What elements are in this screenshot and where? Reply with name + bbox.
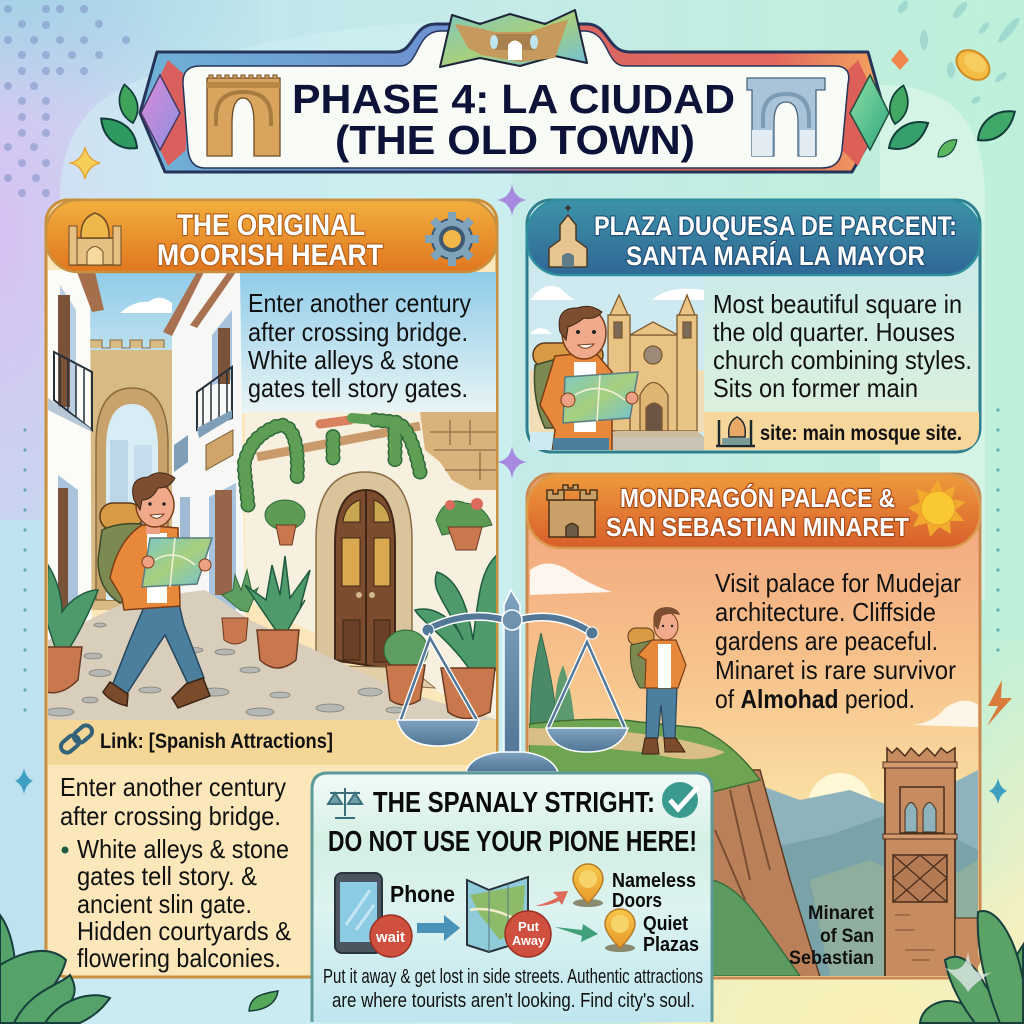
stone gate tower [90,340,174,610]
map emblem [440,10,587,67]
lower text block: Hidden courtyards & [77,916,291,946]
callout text: Put it away & get lost in side streets. Authentic attractions [323,966,703,988]
description text: of Almohad period. [715,684,915,714]
church scene [530,272,704,452]
hiker on cliff [628,607,686,754]
callout headline: DO NOT USE YOUR PIONE HERE! [328,826,697,858]
lower text block: flowering balconies. [77,943,281,973]
gem left [141,75,180,150]
title text: PHASE 4: LA CIUDAD [292,76,735,122]
plant bottom right [920,911,1023,1023]
lower text block: gates tell story. & [77,861,257,891]
cloud [120,298,172,313]
description text: Sits on former main [713,373,918,403]
small pot [222,570,258,644]
intro text background [238,272,496,414]
description text: Most beautiful square in [713,289,962,319]
icon: map with put away badge: Put [518,919,540,934]
arrow: phone to map [417,915,460,941]
header pill [527,200,980,275]
icon: pin one [573,864,603,907]
grassy plateau [529,719,760,792]
intro text: after crossing bridge. [248,317,468,347]
left white building [48,270,104,640]
panel body [527,474,980,978]
description text: church combining styles. [713,345,972,375]
destination label two [643,913,699,956]
balance scale [397,590,628,772]
arched door [308,472,435,688]
icon: sun [908,480,966,537]
right arch icon [747,78,825,156]
icon: castle [547,485,597,537]
street scene [46,270,497,725]
description text: Visit palace for Mudejar [715,568,961,598]
title banner [140,10,889,172]
arrow: to quiet plazas [555,924,598,942]
phone label: Phone [390,881,455,907]
cobbled ground [46,590,497,725]
minaret label: of San [820,926,874,947]
destination label one: Nameless [612,870,696,892]
intro text: White alleys & stone [248,345,459,375]
leafy pot right [415,555,497,718]
link strip: Link: [Spanish Attractions] [100,730,333,753]
header text: THE ORIGINAL [177,209,365,242]
agave pot [245,556,310,668]
callout text [323,966,703,1012]
header text: MOORISH HEART [157,239,383,272]
leaves and sparkle top left [71,83,144,179]
site strip: site: main mosque site. [760,422,962,445]
banner plate [183,31,849,168]
title text: (THE OLD TOWN) [335,117,695,163]
panel: mondragon palace and minaret [527,474,980,978]
intro text: Enter another century [248,288,471,318]
description text [713,289,972,403]
icon: mosque [69,213,121,265]
icon: map with put away badge: Away [512,933,546,948]
left arch icon [207,75,280,156]
shrub pot [384,630,428,705]
destination label one [612,870,696,912]
link strip [48,720,496,765]
callout: do not use your phone [312,773,712,1022]
header text [606,483,909,542]
callout text: are where tourists aren't looking. Find city's soul. [332,990,695,1012]
cliff [712,770,820,977]
lower text block: White alleys & stone [77,834,289,864]
description text: the old quarter. Houses [713,317,955,347]
minaret label [789,903,875,969]
arrow: to nameless doors [535,891,568,906]
gem right [850,75,889,150]
wall with doorway [244,412,497,720]
hiker with map [533,306,638,452]
icon: check badge [662,782,698,818]
hanging vines [244,418,420,505]
icon: phone with wait badge: wait [375,929,405,946]
halftone dots top left [4,5,130,197]
panel: plaza duquesa de parcent [527,200,980,452]
banner frame [140,24,885,172]
description text: architecture. Cliffside [715,597,936,627]
landscape scene [529,563,979,978]
callout headline: THE SPANALY STRIGHT: [373,787,655,819]
header pill [46,200,497,272]
minaret label: Minaret [808,903,875,924]
description text: gardens are peaceful. [715,626,938,656]
church [608,295,697,431]
header text: SANTA MARÍA LA MAYOR [626,240,925,271]
icon: chain link [58,723,95,755]
header text: MONDRAGÓN PALACE & [620,483,895,513]
cypress tree [530,632,556,724]
header text [157,209,383,272]
description text: Minaret is rare survivor [715,655,956,685]
lower text block: ancient slin gate. [77,889,252,919]
intro text [248,288,471,403]
panel: the original moorish heart [46,200,497,977]
title text [292,76,735,163]
gemini sparkle mark [945,952,992,992]
decorations top right: star, coin, leaves [884,0,1022,162]
intro text: gates tell story gates. [248,373,468,403]
callout headline [328,787,697,858]
description text [715,568,961,714]
lower text block [60,772,291,973]
header text: SAN SEBASTIAN MINARET [606,512,909,542]
small leaf bottom [249,991,278,1011]
right white building [163,272,245,640]
mountains [766,770,978,850]
icon: gear [425,212,479,266]
panel body [527,200,980,452]
lower text block: after crossing bridge. [60,801,281,831]
icon: map with put away badge [467,877,551,957]
header pill [527,474,980,548]
header text: PLAZA DUQUESA DE PARCENT: [594,211,957,241]
plant bottom left [0,915,110,1023]
sparkles between panels [15,184,1012,804]
minaret [883,748,979,978]
lower text block: Enter another century [60,772,286,802]
wall flower pots [265,498,492,550]
icon: church [549,205,587,267]
hiker walking with map [98,473,212,708]
panel body [46,200,497,977]
leafy pot left [46,565,98,693]
dotted lines on the margins [23,408,1000,712]
destination label two: Plazas [643,934,699,956]
callout card [312,773,712,1022]
header text [594,211,957,271]
icon: scales small [328,788,362,818]
destination label one: Doors [612,890,662,912]
icon: phone with wait badge [335,873,412,957]
site strip [704,412,979,450]
destination label two: Quiet [643,913,688,935]
icon: mosque site [716,417,755,446]
minaret label: Sebastian [789,948,874,969]
icon: pin two [605,909,635,952]
